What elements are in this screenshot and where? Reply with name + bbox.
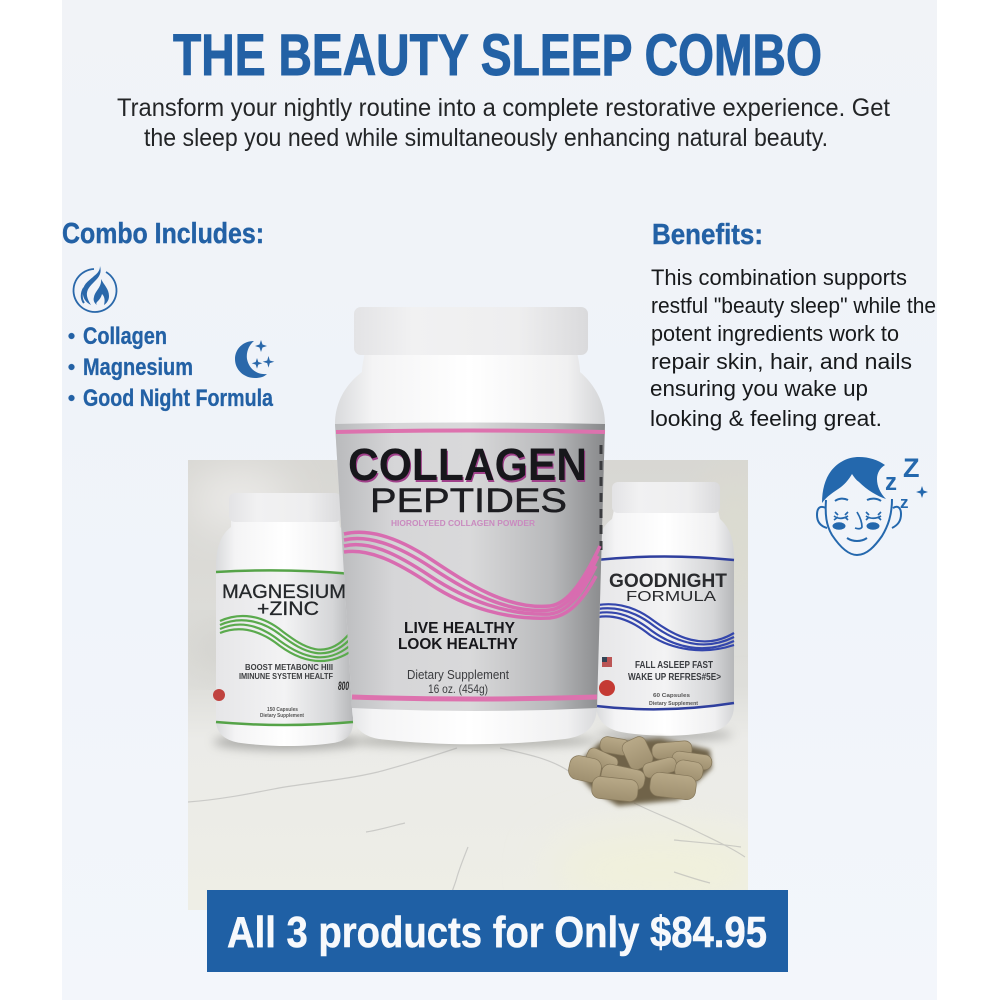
text: benefits description: potent ingredients work to [651, 321, 899, 346]
list: products: Good Night Formula [83, 385, 274, 412]
icon: collagen flame [74, 266, 117, 312]
product: collagen peptides jar: COLLAGEN [349, 441, 588, 492]
product: magnesium zinc bottle: Dietary Supplement [260, 713, 304, 719]
heading: benefits: Benefits: [652, 219, 763, 251]
product: magnesium zinc bottle: 150 Capsules [267, 707, 298, 713]
product: goodnight formula bottle: Dietary Supplement [649, 701, 698, 707]
product: goodnight formula bottle: GOODNIGHT [609, 571, 727, 592]
product: goodnight formula bottle: 60 Capsules [653, 693, 690, 699]
product: collagen peptides jar: LOOK HEALTHY [398, 636, 518, 653]
product: magnesium zinc bottle: MAGNESIUM [222, 582, 346, 603]
text: benefits description: This combination supports [651, 265, 907, 290]
product: collagen peptides jar [335, 307, 605, 747]
icon: moon and stars [235, 340, 274, 378]
icon: sleeping face: z [885, 469, 897, 496]
product: collagen peptides jar: COLLAGEN [348, 439, 587, 490]
panel: benefits [650, 219, 936, 555]
product: collagen peptides jar: Dietary Supplement [407, 668, 509, 682]
price banner [207, 890, 788, 972]
text: benefits description: restful "beauty sleep" while the [651, 293, 936, 318]
title: THE BEAUTY SLEEP COMBO [173, 23, 822, 88]
text: benefits description: ensuring you wake up [650, 376, 868, 401]
product: collagen peptides jar: 16 oz. (454g) [428, 682, 488, 696]
product: goodnight formula bottle: FALL ASLEEP FAST [635, 660, 713, 671]
product: collagen peptides jar: LIVE HEALTHY [404, 620, 515, 637]
list: products [68, 323, 274, 412]
product: magnesium zinc bottle: 800 [338, 679, 349, 693]
product: collagen peptides jar: HIOROLYEED COLLAGEN POWDER [391, 519, 535, 528]
text: benefits description: repair skin, hair, and nails [651, 349, 912, 374]
product: magnesium zinc bottle: BOOST METABONC HIII [245, 663, 333, 672]
product: magnesium zinc bottle [213, 493, 357, 750]
panel: combo includes [62, 218, 274, 412]
heading: combo includes: Combo Includes: [62, 218, 264, 250]
product: magnesium zinc bottle: IMINUNE SYSTEM HEALTF [239, 672, 333, 681]
product: goodnight formula bottle: FORMULA [626, 588, 716, 605]
intro text: the sleep you need while simultaneously enhancing natural beauty. [144, 124, 828, 152]
price banner: All 3 products for Only $84.95 [227, 908, 767, 957]
list: products: Collagen [83, 323, 167, 350]
product: magnesium zinc bottle: +ZINC [257, 599, 319, 620]
icon: sleeping face: Z [903, 453, 920, 483]
icon: sleeping face: z [900, 493, 908, 512]
text: benefits description: looking & feeling great. [650, 406, 882, 431]
list: products: Magnesium [83, 354, 193, 381]
product: collagen peptides jar: PEPTIDES [370, 482, 567, 520]
text: benefits description [650, 265, 936, 431]
product: goodnight formula bottle [596, 482, 734, 741]
pills pile [567, 734, 713, 806]
intro text: Transform your nightly routine into a complete restorative experience. Get [117, 94, 890, 122]
intro text [117, 94, 890, 152]
marble background photo [180, 460, 770, 910]
icon: sleeping face [817, 453, 928, 555]
product: goodnight formula bottle: WAKE UP REFRES#5E> [628, 672, 721, 683]
